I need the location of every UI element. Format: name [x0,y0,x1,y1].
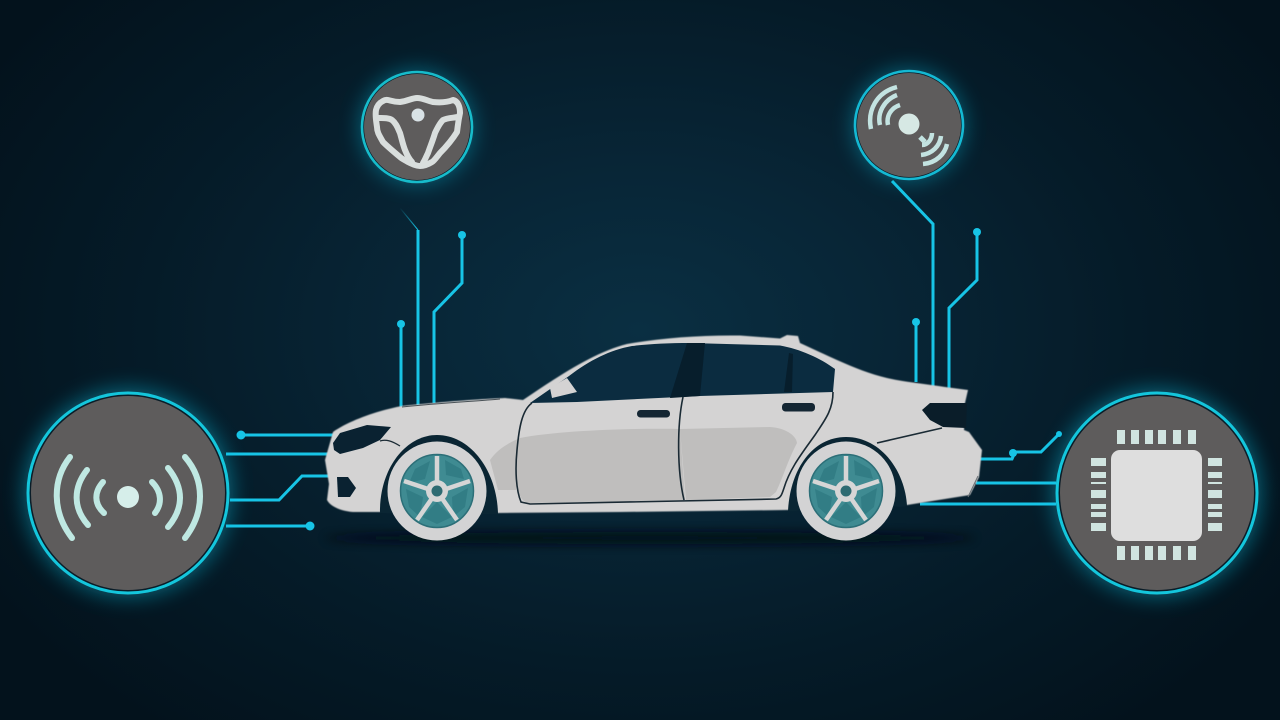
rear wheel arch [788,437,907,511]
car body [325,335,982,513]
door handles [637,410,670,418]
icon: wireless waves [57,457,200,538]
icon: steering wheel [376,98,460,166]
icon: signal waves [870,87,947,164]
mirror [550,378,577,398]
panel: left wireless circle [23,388,233,598]
side windows [530,343,835,403]
car shadow [325,532,975,544]
front grille [337,477,356,497]
headlight [333,425,391,454]
front wheel [388,442,486,540]
circuit lines: right [920,431,1062,504]
door shade [516,427,797,503]
panel: steering wheel circle [359,69,475,185]
taillight [922,403,967,428]
rear wheel [796,442,896,540]
circuit lines: left [226,430,334,530]
panel: chip circle [1052,388,1262,598]
window pillars [670,343,705,398]
car [325,335,982,540]
circuit lines: top right [892,181,981,390]
icon: microchip [1091,430,1222,560]
door lines [402,392,978,504]
panel: satellite signal circle [852,68,966,182]
front wheel arch [380,435,498,514]
circuit lines: top left [397,208,466,408]
